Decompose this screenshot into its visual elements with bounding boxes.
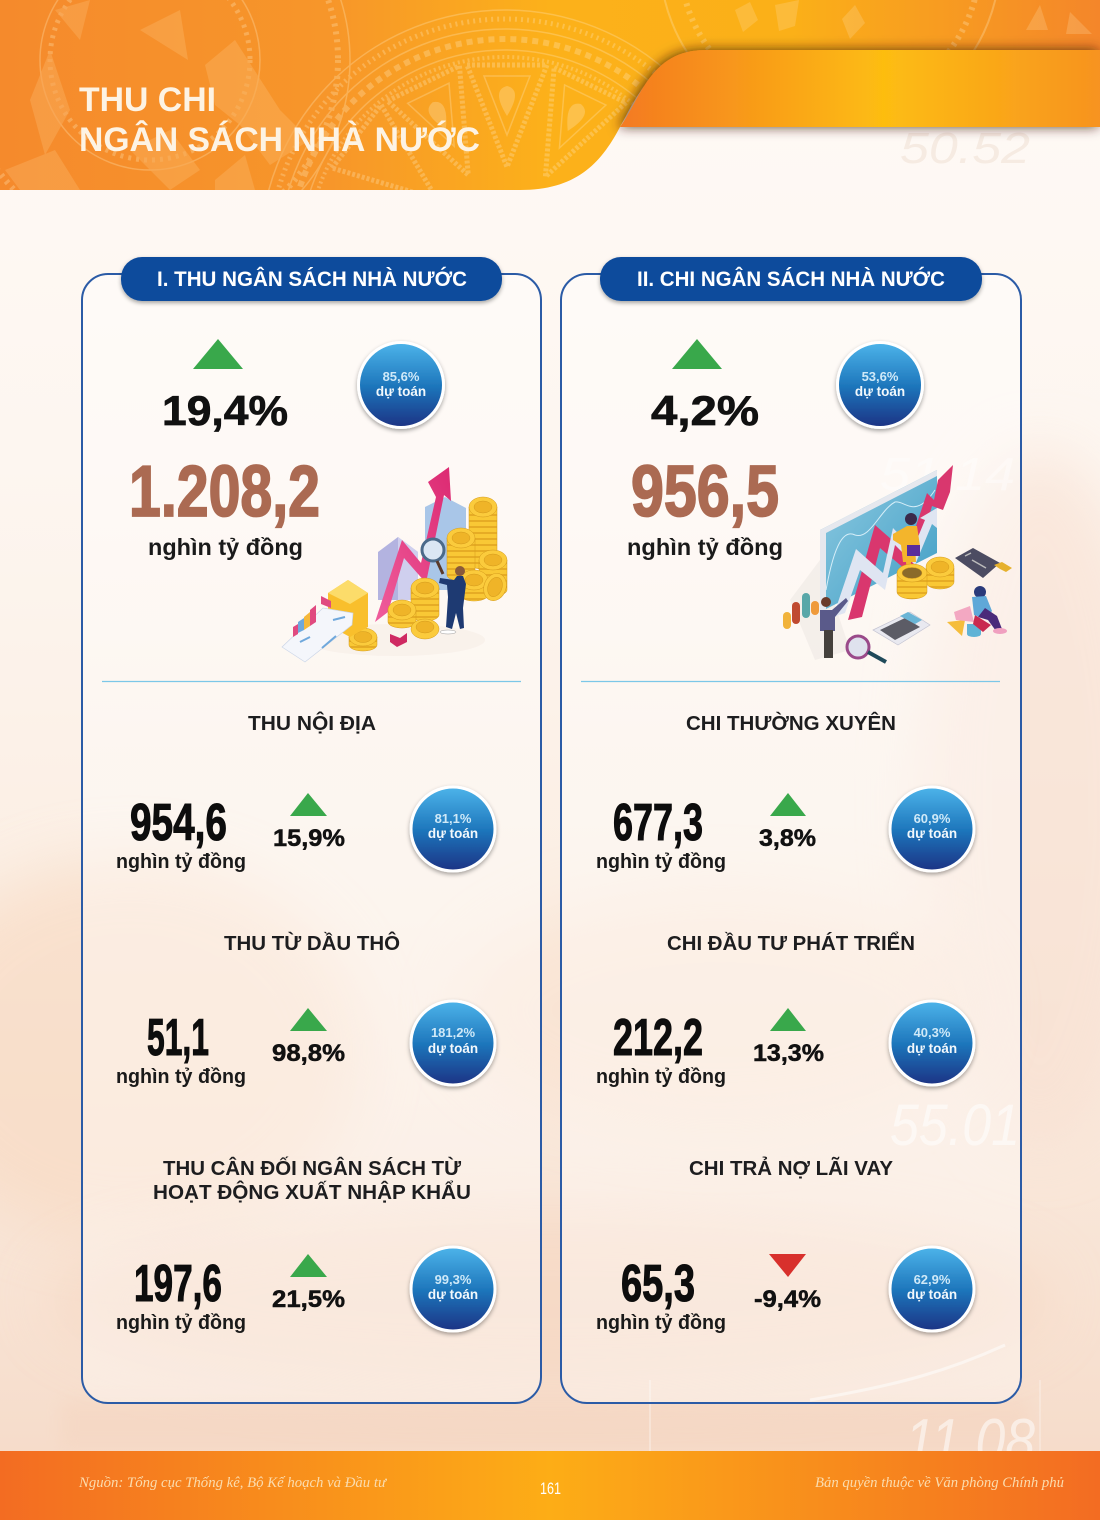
row: domestic revenue	[116, 787, 495, 873]
sub-heading: debt interest: CHI TRẢ NỢ LÃI VAY	[689, 1157, 894, 1180]
row: recurrent expenditure: 3,8%	[759, 825, 816, 852]
businessman	[439, 566, 466, 634]
row: import export revenue: nghìn tỷ đồng	[116, 1312, 246, 1334]
row: crude oil revenue: dự toán	[428, 1041, 478, 1056]
row: crude oil revenue: 51,1	[147, 1009, 209, 1067]
row: debt interest: nghìn tỷ đồng	[596, 1312, 726, 1334]
row: domestic revenue: 15,9%	[273, 825, 345, 852]
badge: 53,6% estimate: dự toán	[855, 384, 905, 399]
magnifier	[847, 636, 869, 658]
source note: Nguồn: Tổng cục Thống kê, Bộ Kế hoạch và Đầu tư	[78, 1475, 388, 1491]
panel heading: revenue	[121, 257, 502, 301]
row: development investment	[596, 1001, 974, 1088]
growth: 4,2%: 4,2%	[651, 387, 759, 434]
standing man	[820, 597, 848, 658]
badge: 85,6% estimate: dự toán	[376, 384, 426, 399]
row: development investment: 13,3%	[753, 1040, 824, 1067]
divider	[102, 680, 521, 682]
sub-heading: recurrent expenditure: CHI THƯỜNG XUYÊN	[686, 711, 896, 735]
total revenue value: 1.208,2	[129, 452, 320, 532]
panel heading: revenue: I. THU NGÂN SÁCH NHÀ NƯỚC	[157, 267, 467, 291]
mini bars	[783, 593, 819, 629]
row: domestic revenue: 954,6	[130, 794, 227, 852]
row: development investment: nghìn tỷ đồng	[596, 1066, 726, 1088]
row: development investment: 40,3%	[914, 1025, 951, 1040]
header ribbon	[620, 50, 1100, 127]
page background: 11.08	[905, 1407, 1035, 1476]
panel: expenditure	[561, 257, 1021, 1403]
badge: 85,6% estimate	[358, 342, 444, 428]
report paper	[282, 608, 353, 662]
row: crude oil revenue: 98,8%	[272, 1040, 345, 1067]
row: domestic revenue: nghìn tỷ đồng	[116, 851, 246, 873]
sub-heading: import export revenue: HOẠT ĐỘNG XUẤT NHẬP KHẨU	[153, 1180, 471, 1204]
badge: 85,6% estimate: 85,6%	[383, 369, 420, 384]
title: NGÂN SÁCH NHÀ NƯỚC	[79, 121, 480, 159]
panel heading: expenditure	[600, 257, 982, 301]
row: development investment: dự toán	[907, 1041, 957, 1056]
row: import export revenue: 197,6	[134, 1255, 222, 1313]
row: recurrent expenditure: dự toán	[907, 826, 957, 841]
row: recurrent expenditure: nghìn tỷ đồng	[596, 851, 726, 873]
title	[79, 81, 480, 159]
woman on coins	[893, 513, 920, 573]
growth: 19,4%: 19,4%	[162, 387, 288, 434]
row: development investment: 212,2	[613, 1009, 703, 1067]
page number: 161	[540, 1479, 561, 1498]
seated woman	[972, 586, 1007, 634]
row: import export revenue: dự toán	[428, 1287, 478, 1302]
sub-heading: import export revenue: THU CÂN ĐỐI NGÂN SÁCH TỪ	[163, 1156, 461, 1180]
divider	[581, 680, 1000, 682]
row: import export revenue: 21,5%	[272, 1286, 345, 1313]
unit: nghìn tỷ đồng	[627, 534, 783, 560]
badge: 53,6% estimate	[838, 342, 922, 428]
header banner	[0, 0, 1100, 190]
row: domestic revenue: dự toán	[428, 826, 478, 841]
magnifier	[422, 539, 444, 561]
row: import export revenue	[116, 1247, 495, 1334]
row: crude oil revenue: 181,2%	[431, 1025, 475, 1040]
badge: 53,6% estimate: 53,6%	[862, 369, 899, 384]
illustration: coins and growth arrow	[282, 467, 510, 662]
row: domestic revenue: 81,1%	[435, 811, 472, 826]
coin stacks	[349, 497, 510, 651]
row: import export revenue: 99,3%	[435, 1272, 472, 1287]
sub-heading: import export revenue	[153, 1156, 471, 1204]
panel heading: expenditure: II. CHI NGÂN SÁCH NHÀ NƯỚC	[637, 267, 945, 291]
row: crude oil revenue	[116, 1001, 495, 1088]
sub-heading: domestic revenue: THU NỘI ĐỊA	[248, 711, 376, 735]
row: debt interest: 65,3	[621, 1255, 695, 1313]
page background: 51.14	[880, 448, 1015, 500]
footer	[0, 1451, 1100, 1520]
total expenditure value: 956,5	[631, 452, 779, 532]
row: recurrent expenditure	[596, 787, 974, 873]
icon: up arrow total revenue	[193, 339, 243, 369]
title: THU CHI	[79, 81, 216, 119]
page background: 50.52	[900, 124, 1030, 173]
row: debt interest: -9,4%	[754, 1286, 821, 1313]
panel: revenue	[82, 257, 541, 1403]
row: recurrent expenditure: 677,3	[613, 794, 703, 852]
row: crude oil revenue: nghìn tỷ đồng	[116, 1066, 246, 1088]
drum pattern	[0, 0, 1092, 190]
sub-heading: development investment: CHI ĐẦU TƯ PHÁT TRIỂN	[667, 932, 915, 955]
sub-heading: crude oil revenue: THU TỪ DẦU THÔ	[224, 931, 400, 955]
yellow box	[328, 580, 368, 637]
copyright: Bản quyền thuộc về Văn phòng Chính phủ	[815, 1475, 1064, 1491]
calculator	[873, 612, 930, 645]
row: recurrent expenditure: 60,9%	[914, 811, 951, 826]
icon: up arrow total expenditure	[672, 339, 722, 369]
illustration: chart screen and people	[783, 465, 1012, 662]
page background: 55.01	[890, 1093, 1020, 1158]
row: debt interest	[596, 1247, 974, 1334]
row: debt interest: 62,9%	[914, 1272, 951, 1287]
unit: nghìn tỷ đồng	[148, 534, 303, 560]
pie chart	[947, 606, 991, 637]
credit card	[955, 548, 1000, 578]
row: debt interest: dự toán	[907, 1287, 957, 1302]
